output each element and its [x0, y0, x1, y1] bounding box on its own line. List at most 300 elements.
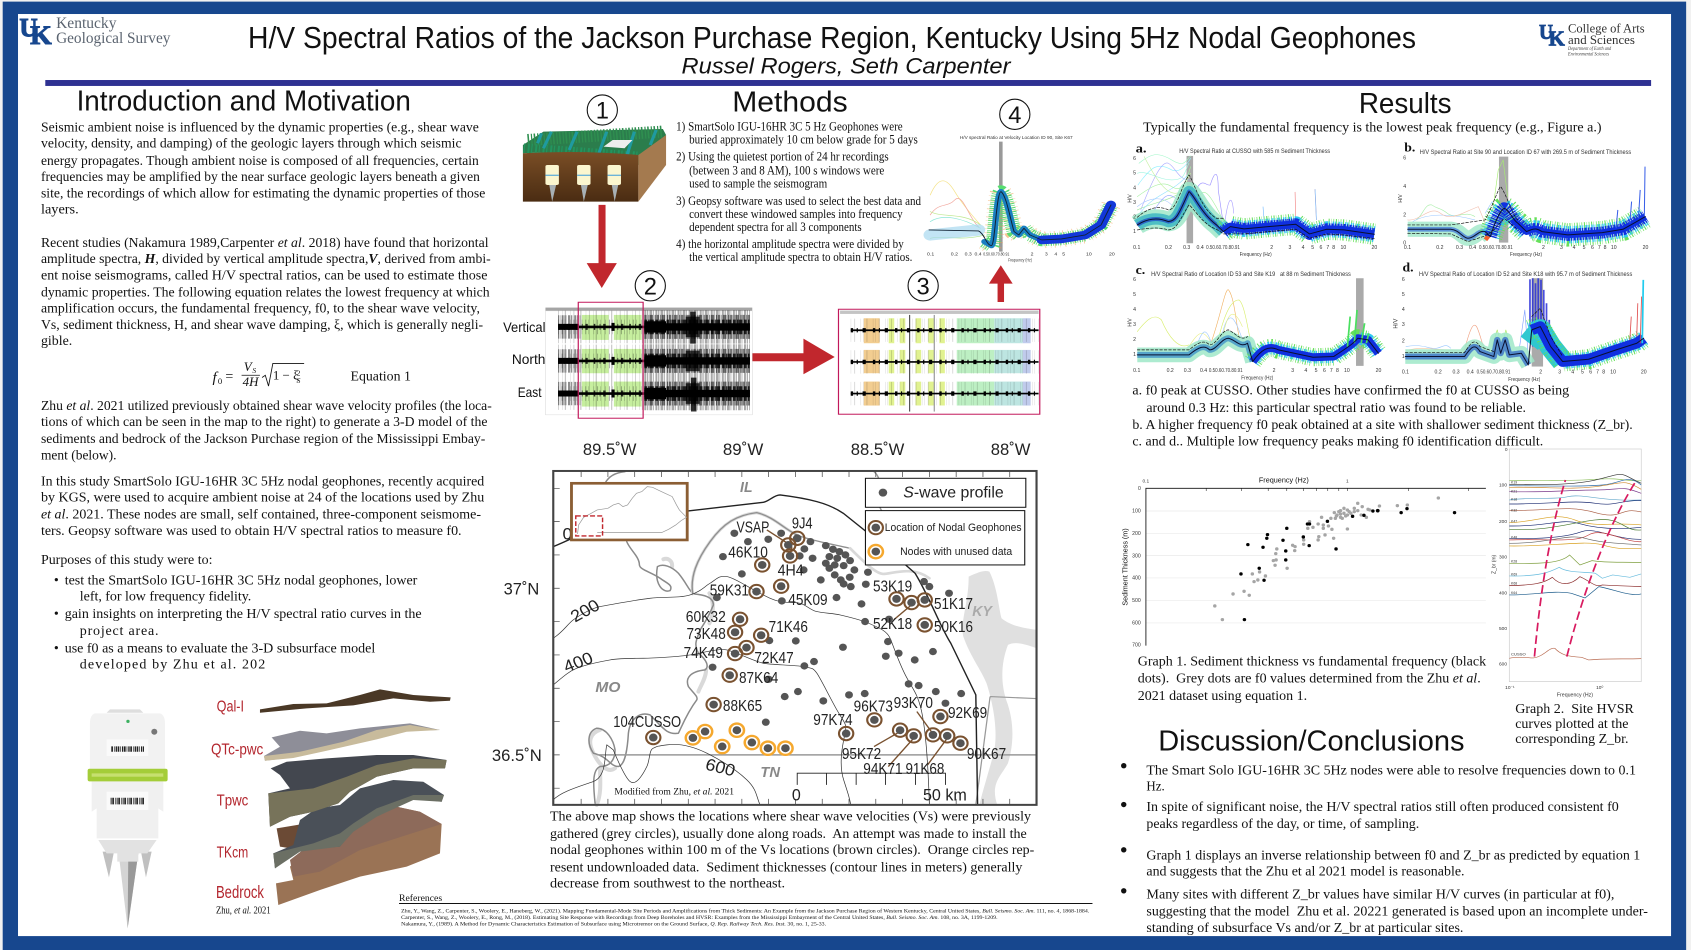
text block: map description: nodal geophones within 100 m of the Vs locations (brown circles). Orange circles rep- [550, 843, 1035, 858]
site labels: 90K67 [967, 745, 1006, 763]
text block: map description: resent undownloaded data. Sediment thicknesses (contour lines in meters) generally [550, 860, 1022, 875]
chart a: 2 [1133, 214, 1136, 220]
chart c: 5 [1133, 292, 1136, 298]
text block: intro paragraph 3: tions of which can be seen in the map to the right) to generate a 3-D model of the [41, 415, 487, 430]
site labels: 52K18 [873, 615, 912, 633]
chart b: b. [1404, 141, 1415, 155]
chart a: Frequency (Hz) [1240, 252, 1272, 258]
site labels: 4H4 [778, 562, 804, 579]
chart b: 8 [1604, 245, 1607, 251]
nodal geophone locations [646, 532, 968, 750]
site labels: 45K09 [788, 591, 828, 609]
text block: figure notes: b. A higher frequency f0 peak obtained at a site with shallower sediment thickness (Z_br). [1132, 418, 1633, 433]
chart c: c. [1136, 263, 1145, 277]
bullet 4: Many sites with different Z_br values have similar H/V curves (in particular at f0), [1146, 887, 1614, 902]
chart c: 0.4 [1200, 368, 1207, 374]
chart d: 4 [1571, 370, 1574, 376]
text block: map description: decrease from southwest to the northeast. [550, 877, 785, 892]
axis labels: 300 [1499, 554, 1507, 560]
chart b: 4 [1403, 184, 1406, 190]
text block: methods steps: used to sample the seismogram [689, 177, 827, 191]
axis labels: 100 [1132, 509, 1141, 515]
logo: College of Arts and Sciences: K [1549, 26, 1565, 50]
axis labels: 600 [1132, 621, 1141, 627]
labels: states and contours: 400 [560, 648, 596, 676]
panel: geophone and subsurface layers [88, 689, 451, 928]
site labels [613, 515, 1006, 778]
axis labels: 600 [1499, 661, 1507, 667]
grey dots: Zhu dataset [1213, 496, 1440, 621]
text block: methods steps: dependent spectra for all 3 components [689, 220, 862, 234]
equation 1: S [252, 366, 256, 375]
text block: figure notes [1132, 384, 1633, 449]
equation 1: = [225, 370, 233, 385]
chart: final H/V spectral ratio curve: 4 [1054, 252, 1058, 257]
panel: discussion and conclusions [1121, 726, 1648, 936]
site labels: 50K16 [934, 619, 973, 636]
text block: intro paragraph 3 [41, 399, 492, 463]
site labels: 87K64 [739, 669, 778, 687]
site labels: 94K71 [863, 760, 903, 778]
chart b: 2 [1542, 245, 1545, 251]
bullet 2 [1121, 800, 1619, 832]
site labels: 73K48 [686, 625, 726, 643]
chart d: 2 [1402, 339, 1405, 345]
site labels: 60K32 [686, 609, 726, 626]
text block: intro paragraph 1: energy propagates. Though ambient noise is composed of all frequencies, certain [41, 154, 479, 169]
chart d: 2 [1539, 370, 1542, 376]
icon: nodal geophone [88, 709, 168, 928]
text block: intro paragraph 4: by KGS, were used to acquire ambient noise at 24 of the locations used by Zhu [41, 490, 484, 505]
chart b: 6 [1403, 155, 1406, 161]
text block: map description [550, 810, 1035, 892]
axis labels: 10⁻¹ [1505, 685, 1515, 691]
logo: Kentucky Geological Survey: K [30, 21, 52, 50]
text block: methods steps: 1) SmartSolo IGU-16HR 3C 5 Hz Geophones were [676, 119, 903, 133]
logo: College of Arts and Sciences: Department of Earth and [1567, 47, 1612, 52]
inset: Kentucky locator map [571, 483, 687, 540]
text block: intro paragraph 2: gible. [41, 334, 72, 349]
labels: states and contours: 0 [563, 524, 572, 543]
zero contour boundary [553, 495, 978, 805]
chart: final H/V spectral ratio curve: 0.50.60.70.80.91 [983, 252, 1010, 257]
bullet 2: In spite of significant noise, the H/V spectral ratios still often produced consistent f0 [1146, 800, 1619, 815]
chart a: 6 [1133, 156, 1136, 162]
chart d: H/V Spectral Ratio of Location ID 52 and Site K18 with 95.7 m of Sediment Thickness [1419, 271, 1632, 278]
chart c: 4 [1133, 307, 1136, 313]
chart d: 5 [1581, 370, 1584, 376]
labels: states and contours: TN [760, 764, 781, 781]
text block: intro paragraph 2: amplitude spectra, H, divided by vertical amplitude spectra,V, derived from ambi- [41, 252, 491, 267]
text block: graph 1 caption: dots). Grey dots are f0 values determined from the Zhu et al. [1138, 672, 1481, 687]
equation 1 [212, 359, 411, 389]
axis labels: CUSSO [1511, 652, 1526, 657]
labels: states and contours: 600 [703, 754, 738, 780]
equation 1: 2 [297, 368, 301, 377]
chart d: 0.3 [1452, 370, 1460, 376]
text block: intro paragraph 1: site, the recordings of which allow for estimating the dynamic properties of those [41, 186, 485, 201]
chart: final H/V spectral ratio curve [927, 135, 1115, 263]
chart b: 0 [1403, 241, 1406, 247]
chart d: 0.1 [1402, 370, 1409, 376]
heading: discussion: Discussion/Conclusions [1158, 726, 1465, 758]
equation 1: 1 − ξ [273, 368, 299, 383]
axis labels: Frequency (Hz) [1557, 693, 1593, 699]
text block: intro paragraph 1: velocity, density, and damping) of the geologic layers through which seismic [41, 137, 462, 152]
chart a: 7 [1326, 245, 1329, 251]
bullet 4 [1121, 887, 1648, 936]
axis labels: 500 [1499, 626, 1507, 632]
text block: graph 1 caption: 2021 dataset using equation 1. [1138, 689, 1307, 704]
text block: graph 2 caption: corresponding Z_br. [1515, 732, 1628, 747]
logo: College of Arts and Sciences [1539, 20, 1645, 58]
chart d: 3 [1558, 370, 1561, 376]
map scale bar: 0 [792, 785, 801, 804]
axis labels: K21 [1511, 490, 1517, 494]
labels: components [503, 320, 545, 401]
site labels: 88K65 [723, 698, 762, 715]
text block: intro paragraph 2: amplification occurs, the fundamental frequency, f0, to the shear wave velocity, [41, 302, 480, 317]
bullet 3 [1121, 847, 1640, 880]
text block: methods steps: (between 3 and 8 AM), 100 s windows were [689, 164, 885, 178]
axis labels: 400 [1132, 576, 1141, 582]
dashed trend lines [1534, 480, 1637, 657]
charts: H/V spectral ratio figures a to d [1127, 141, 1649, 383]
chart: exploded 3-D layer model [260, 689, 451, 905]
chart d: H/V [1393, 318, 1400, 329]
chart b: 7 [1598, 245, 1601, 251]
chart: final H/V spectral ratio curve: Frequency (Hz) [1008, 258, 1032, 263]
chart b: 6 [1591, 245, 1594, 251]
chart c: 0.3 [1184, 368, 1191, 374]
panel: results [1121, 88, 1649, 747]
site labels: 95K72 [842, 745, 881, 763]
chart a: 3 [1289, 245, 1292, 251]
map axis labels: 37˚N [504, 579, 539, 598]
chart a: 0.1 [1133, 245, 1141, 251]
text block: figure notes: around 0.3 Hz: this particular spectral ratio was found to be reliable. [1146, 401, 1526, 416]
chart d: 3 [1402, 322, 1405, 328]
chart c: Frequency (Hz) [1241, 376, 1274, 382]
text block: purposes list: • [54, 574, 59, 589]
chart c: 2 [1133, 337, 1136, 343]
chart: final H/V spectral ratio curve: 0.2 [951, 252, 958, 257]
arrow: step 2 to step 3 [752, 339, 835, 374]
chart d: 10 [1610, 370, 1616, 376]
map frame [553, 471, 1037, 805]
step number 4 [1000, 99, 1030, 129]
site labels: 92K69 [948, 705, 987, 722]
chart d: 0.50.60.70.80.91 [1477, 370, 1510, 376]
axis labels: 10⁰ [1596, 685, 1603, 691]
site labels: 72K47 [754, 649, 794, 667]
chart c: 3 [1133, 322, 1136, 328]
step number 4: 4 [1008, 103, 1021, 129]
chart b: 20 [1643, 245, 1649, 251]
chart: final H/V spectral ratio curve: 0.3 [965, 252, 972, 257]
text block: purposes list: left, for low frequency fidelity. [80, 590, 251, 605]
site labels: 59K31 [710, 582, 749, 599]
chart: final H/V spectral ratio curve: 3 [1045, 252, 1048, 257]
chart d: Frequency (Hz) [1508, 377, 1541, 383]
chart: final H/V spectral ratio curve: H/V spectral Ratio at Velocity Location ID 90, Site K67 [960, 135, 1073, 141]
header divider bar [45, 80, 1651, 86]
chart c: 6 [1133, 277, 1136, 283]
text block: figure notes: a. f0 peak at CUSSO. Other studies have confirmed the f0 at CUSSO as being [1132, 384, 1569, 399]
logo: Kentucky Geological Survey [19, 14, 171, 50]
text block: intro paragraph 2: dynamic properties. The following equation relates the lowest frequency at which [41, 286, 490, 301]
chart: windowed seismogram samples [838, 309, 1040, 414]
chart a: H/V [1127, 194, 1133, 203]
text block: methods steps: 2) Using the quietest portion of 24 hr recordings [676, 150, 889, 164]
chart a: 1 [1133, 229, 1136, 235]
logo: Kentucky Geological Survey: U [19, 14, 38, 43]
text block: intro paragraph 1: frequencies may be amplified by the near surface geologic layers beneath a given [41, 170, 480, 185]
heading: results: Results [1359, 88, 1452, 120]
bullet 1 [1121, 763, 1636, 794]
logo: Kentucky Geological Survey: Kentucky [56, 15, 117, 32]
chart c: 4 [1304, 368, 1307, 374]
text block: intro paragraph 1 [41, 121, 485, 218]
site labels: 74K49 [684, 644, 723, 662]
chart a: 2 [1270, 245, 1273, 251]
chart a: 10 [1341, 245, 1346, 251]
chart d: 4 [1402, 307, 1405, 313]
axis labels: 400 [1499, 590, 1507, 596]
chart c: 1 [1133, 352, 1136, 358]
chart: final H/V spectral ratio curve: 0.4 [975, 252, 982, 257]
chart a: 4 [1302, 245, 1305, 251]
map axis labels [492, 440, 1031, 765]
chart b: 10 [1611, 245, 1617, 251]
map scale bar [792, 773, 967, 804]
legend: S-wave profile [865, 478, 1026, 507]
axis labels: 200 [1132, 531, 1141, 537]
panel: introduction and motivation [41, 86, 492, 673]
text block: graph 2 caption: Graph 2. Site HVSR [1515, 702, 1634, 717]
map axis labels: 88.5˚W [851, 440, 905, 459]
chart a: 5 [1311, 245, 1314, 251]
nodes with unused data [686, 724, 793, 755]
axis labels: 1 [1346, 479, 1349, 485]
labels: geologic units: Qal-I [217, 698, 244, 715]
text block: intro paragraph 3: Zhu et al. 2021 utilized previously obtained shear wave velocity profiles (the loca- [41, 399, 492, 414]
title: H/V Spectral Ratios of the Jackson Purchase Region, Kentucky Using 5Hz Nodal Geophones [248, 20, 1416, 55]
panel: map of S-wave profiles and geophone nodes [492, 440, 1037, 805]
legend: S-wave profile: S-wave profile [903, 484, 1004, 501]
labels: states and contours [560, 479, 994, 781]
bullet 3: and suggests that the Zhu et al 2021 model is reasonable. [1146, 865, 1465, 880]
axis labels [1491, 447, 1603, 699]
text block: purposes list [41, 553, 422, 673]
axis labels: K69 [1511, 572, 1517, 576]
text block: intro paragraph 4: ters. Geopsy software was used to obtain H/V spectral ratios to measure f0. [41, 524, 462, 539]
chart a: 4 [1133, 185, 1136, 191]
labels: geologic units: Zhu, et al. 2021 [216, 905, 271, 916]
equation 1: 4H [243, 374, 259, 389]
chart c: 8 [1336, 368, 1339, 374]
contour lines of sediment thickness [553, 576, 929, 805]
text block: purposes list: • [54, 607, 59, 622]
S-wave profile dots [709, 530, 965, 726]
labels: geologic units [211, 698, 271, 916]
quiet window traces [558, 327, 644, 394]
step number 2 [635, 271, 665, 301]
chart b: 4 [1573, 245, 1576, 251]
text block: methods steps: the vertical amplitude spectra to obtain H/V ratios. [689, 250, 912, 264]
arrow: step 3 to step 4 [989, 265, 1013, 302]
chart a: 0.2 [1165, 245, 1172, 251]
map axis labels: 89.5˚W [583, 440, 637, 459]
site labels: VSAP [736, 519, 769, 536]
chart d: 8 [1602, 370, 1605, 376]
references: Nakamura, Y., (1989). A Method for Dynamic Characteristics Estimation of Subsurface using Microtremor on the Ground Surface, Q. Rep. Railway Tech. Res. Inst. 30, no. 1, 25-33. [401, 922, 826, 927]
site labels: 53K19 [873, 578, 912, 595]
axis labels: Frequency (Hz) [1259, 475, 1309, 484]
axis labels: K18 [1511, 498, 1517, 502]
axis labels [1121, 475, 1349, 649]
chart d: 6 [1402, 277, 1405, 283]
axis labels: K47 [1511, 520, 1517, 524]
text block: purposes list: use f0 as a means to evaluate the 3-D subsurface model [65, 641, 375, 656]
chart b: 0.1 [1404, 245, 1411, 251]
text block: figure notes: c. and d.. Multiple low frequency peaks making f0 identification difficult. [1132, 434, 1543, 449]
text block: intro paragraph 1: Seismic ambient noise is influenced by the dynamic properties (e.g., shear wave [41, 121, 479, 136]
chart b [1398, 141, 1649, 258]
labels: states and contours: IL [740, 479, 753, 496]
chart: graph 1 sediment thickness vs frequency [1121, 475, 1486, 649]
heading: methods: Methods [732, 87, 848, 119]
logo: Kentucky Geological Survey: Geological Survey [56, 30, 171, 47]
axis labels: 200 [1499, 519, 1507, 525]
chart b: H/V Spectral Ratio at Site 90 and Location ID 67 with 269.5 m of Sediment Thickness [1420, 149, 1631, 156]
text block: intro paragraph 4 [41, 474, 484, 539]
axis labels: K19 [1511, 480, 1517, 484]
chart: final H/V spectral ratio curve: 2 [1031, 252, 1034, 257]
site labels: 71K46 [769, 619, 808, 636]
chart c: 3 [1291, 368, 1294, 374]
chart a: 0.4 [1197, 245, 1204, 251]
chart d: 5 [1402, 292, 1405, 298]
chart c: 2 [1273, 368, 1276, 374]
references [399, 893, 1092, 927]
site labels: 104CUSSO [613, 714, 681, 731]
step number 1: 1 [596, 99, 609, 125]
text block: purposes list: test the SmartSolo IGU-16HR 3C 5Hz nodal geophones, lower [65, 574, 418, 589]
chart c: H/V [1127, 318, 1133, 327]
step number 2: 2 [644, 274, 657, 300]
text block: intro paragraph 2: Recent studies (Nakamura 1989,Carpenter et al. 2018) have found that horizontal [41, 236, 489, 251]
logo: College of Arts and Sciences: U [1539, 20, 1553, 44]
axis labels: 700 [1132, 643, 1141, 649]
chart c: 0.2 [1167, 368, 1174, 374]
chart b: 0.4 [1469, 245, 1476, 251]
axis labels: 100 [1499, 483, 1507, 489]
panel: methods [503, 87, 1115, 418]
chart b: Frequency (Hz) [1510, 252, 1542, 258]
site labels: 51K17 [934, 595, 973, 613]
chart c: 5 [1315, 368, 1318, 374]
text block: graph 1 caption: Graph 1. Sediment thickness vs fundamental frequency (black [1138, 654, 1486, 669]
axis labels: 300 [1132, 553, 1141, 559]
map axis labels: 36.5˚N [492, 746, 542, 765]
site labels: 97K74 [813, 711, 853, 729]
chart b: 0.50.60.70.80.91 [1479, 245, 1513, 251]
text block: purposes list: developed by Zhu et al. 202 [80, 658, 265, 673]
labels: geologic units: Tpwc [217, 793, 249, 810]
step number 1 [587, 95, 617, 125]
equation 1: Equation 1 [350, 370, 411, 385]
axis labels: 0 [1505, 447, 1508, 453]
chart d: 6 [1589, 370, 1592, 376]
axis labels: K28 [1511, 560, 1517, 564]
labels: geologic units: QTc-pwc [211, 742, 264, 759]
chart a: 8 [1332, 245, 1335, 251]
chart d: 20 [1641, 370, 1647, 376]
black dots: measured f0 [1239, 507, 1456, 621]
text block: intro paragraph 3: sediments and bedrock of the Jackson Purchase region of the Mississippi Embay- [41, 432, 486, 447]
arrow: step 1 to step 2 [587, 205, 617, 288]
text block: intro paragraph 2: Vs, sediment thickness, H, and shear wave damping, ξ, which is generally negli- [41, 318, 483, 333]
chart b: 0.3 [1456, 245, 1463, 251]
chart b: H/V [1398, 194, 1404, 203]
site labels: 91K68 [905, 760, 944, 778]
chart d: 0.4 [1467, 370, 1474, 376]
axis labels: 0.1 [1142, 479, 1150, 485]
equation 1: f [212, 370, 218, 386]
chart d: 7 [1596, 370, 1599, 376]
chart a: 3 [1133, 200, 1136, 206]
chart b: 5 [1583, 245, 1586, 251]
site labels: 46K10 [728, 544, 768, 561]
text block: graph 1 caption [1138, 654, 1486, 704]
text block: methods steps: buried approximately 10 cm below grade for 5 days [689, 132, 918, 146]
text block: intro paragraph 2 [41, 236, 491, 349]
chart: final H/V spectral ratio curve: 5 [1062, 252, 1066, 257]
bullet 4: standing of subsurface Vs and/or Z_br at particular sites. [1146, 921, 1463, 936]
selection box [838, 309, 1040, 414]
text block: methods steps [676, 119, 922, 264]
chart b: 2 [1403, 212, 1406, 218]
labels: geologic units: Bedrock [216, 882, 264, 902]
text block: graph 2 caption: curves plotted at the [1515, 717, 1628, 732]
labels: states and contours: 200 [567, 595, 603, 626]
map base: rivers and lakes [589, 472, 1037, 805]
map source note: Modified from Zhu, et al. 2021 [614, 787, 734, 797]
equation 1: 0 [218, 376, 222, 386]
legend: node types: Nodes with unused data [900, 545, 1013, 558]
chart a: 0.50.60.70.80.91 [1206, 245, 1240, 251]
labels: components: Vertical [503, 320, 545, 336]
text block: methods steps: convert these windowed samples into frequency [689, 207, 903, 221]
axis labels: 500 [1132, 598, 1141, 604]
text block: intro paragraph 1: layers. [41, 203, 79, 218]
chart c: 10 [1344, 368, 1350, 374]
chart a: 6 [1320, 245, 1323, 251]
chart: graph 2 site HVSR curves by depth [1491, 447, 1641, 699]
text block: methods steps: 4) the horizontal amplitude spectra were divided by [676, 237, 904, 251]
legend: node types [865, 511, 1025, 565]
text block: purposes list: gain insights on interpreting the H/V spectral ratio curves in the [65, 607, 422, 622]
chart c: 6 [1323, 368, 1326, 374]
map axis labels: 88˚W [991, 440, 1031, 459]
chart c: 20 [1376, 368, 1382, 374]
text block: results intro: Typically the fundamental frequency is the lowest peak frequency (e.g., Figure a.) [1143, 121, 1602, 136]
axis labels: K64 [1511, 591, 1517, 595]
labels: components: North [512, 352, 545, 368]
text block: intro paragraph 4: et al. 2021. These nodes are small, self contained, three-component seismome- [41, 508, 481, 523]
references: Carpenter, S., Wang, Z., Woolery, E., Rong, M., (2018). Estimating Site Response with Recordings from Deep Boreholes and HVSR: Examples from the Mississippi Embayment of the Central United States, Bull. Seismo. Soc. Am. 108, no. 3A, 1199-1209. [401, 916, 998, 921]
